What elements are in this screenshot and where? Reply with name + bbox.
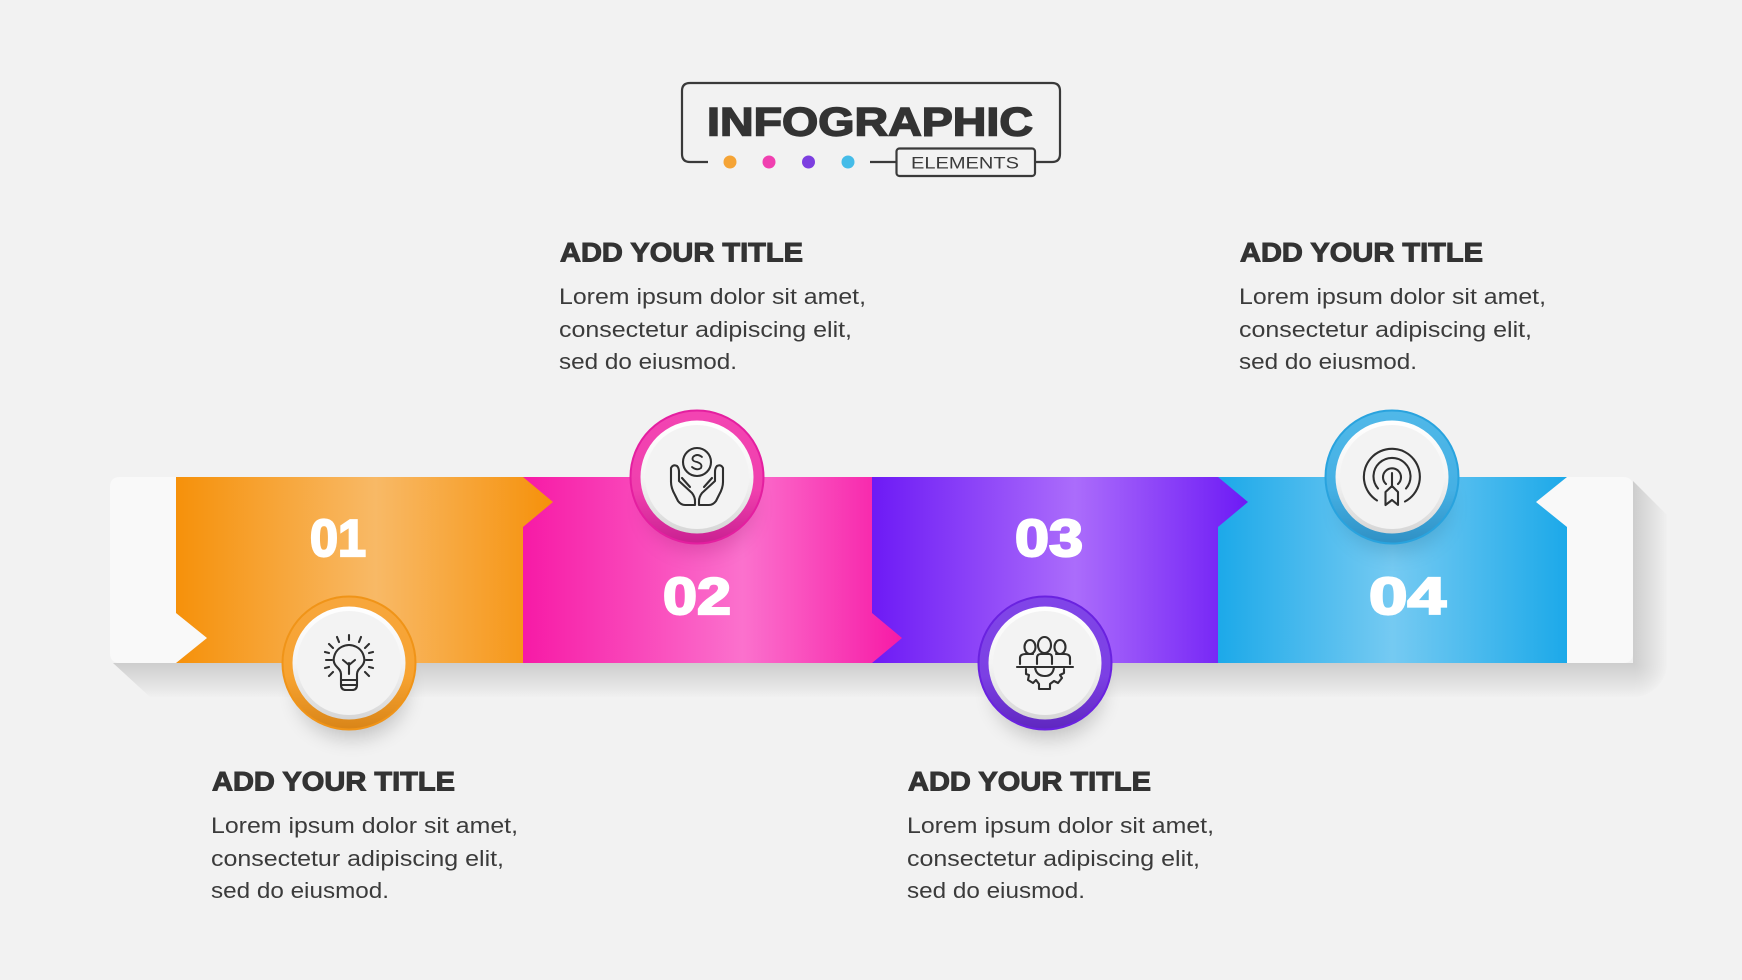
number 01: 01 [310,510,366,568]
text block 02: ADD YOUR TITLE [560,238,803,268]
segment 02 band [523,477,902,663]
text block 04: consectetur adipiscing elit, [1239,317,1532,342]
colored dots [724,156,854,168]
text block 01: ADD YOUR TITLE [212,766,455,796]
icon: target with arrow [1364,449,1420,505]
heading: INFOGRAPHIC: INFOGRAPHIC [707,100,1033,144]
white left panel [110,477,207,663]
icon: team and gear [1017,637,1073,689]
text block 01: consectetur adipiscing elit, [211,846,504,871]
number 04: 04 [1369,568,1446,626]
text block 02 [559,238,866,374]
text block 02: consectetur adipiscing elit, [559,317,852,342]
number 02: 02 [663,568,731,626]
text block 03: consectetur adipiscing elit, [907,846,1200,871]
text block 03: ADD YOUR TITLE [908,766,1151,796]
text block 01 [211,766,518,903]
segment 01 band [176,477,553,663]
text block 04: Lorem ipsum dolor sit amet, [1239,284,1546,309]
text block 01: sed do eiusmod. [211,878,389,903]
icon: light bulb [325,635,373,690]
elements tag: ELEMENTS [911,154,1019,172]
bar cast shadow [113,481,1667,697]
segment 03 band [872,477,1248,663]
text block 04: ADD YOUR TITLE [1240,238,1483,268]
text block 03: sed do eiusmod. [907,878,1085,903]
step 04 badge [1326,410,1458,552]
text block 02: Lorem ipsum dolor sit amet, [559,284,866,309]
step 02 badge [630,410,764,552]
title badge [682,83,1060,176]
elements tag [896,148,1035,176]
text block 02: sed do eiusmod. [559,349,737,374]
text block 01: Lorem ipsum dolor sit amet, [211,813,518,838]
white right panel [1536,477,1633,663]
text block 04 [1239,238,1546,374]
text block 04: sed do eiusmod. [1239,349,1417,374]
text block 03 [907,766,1214,903]
step 03 badge [978,596,1112,738]
number 03: 03 [1015,510,1083,568]
text block 03: Lorem ipsum dolor sit amet, [907,813,1214,838]
icon: hands holding coin [671,448,723,505]
title frame [682,83,1060,162]
step 01 badge [282,596,416,738]
segment 04 band [1218,477,1567,663]
